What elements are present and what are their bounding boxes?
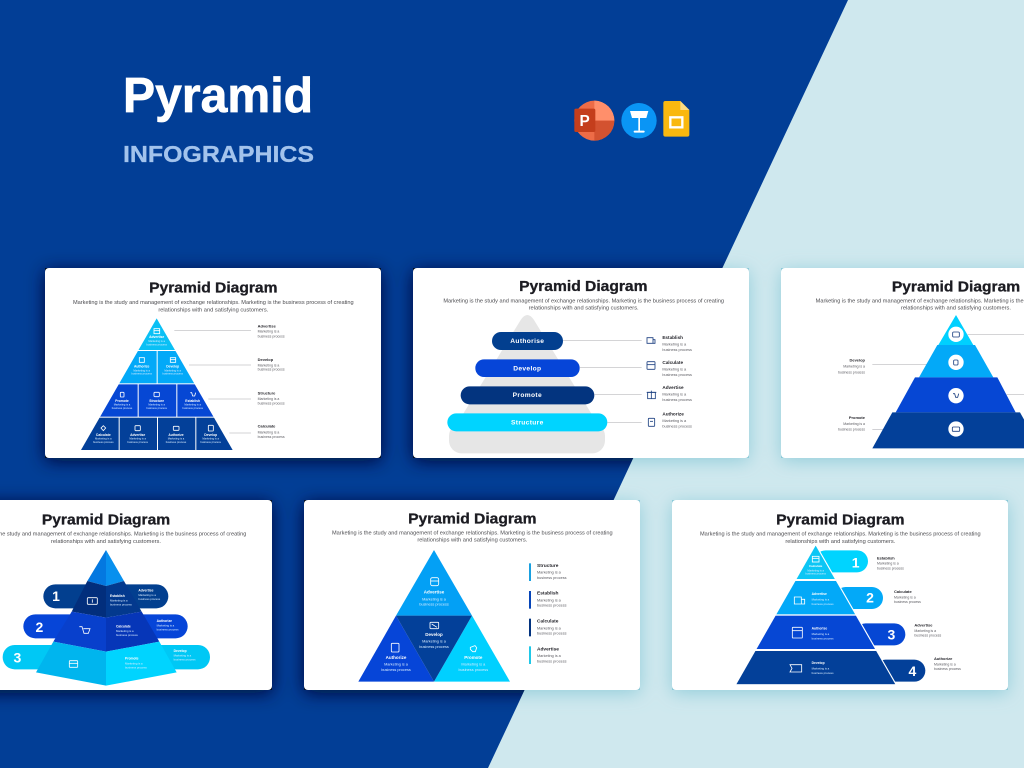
panel: stacked pills pyramid: [413, 268, 749, 458]
side labels: business process: [934, 667, 961, 671]
side labels: Advertise: [662, 385, 684, 390]
pyramid and pill labels: business process: [125, 665, 147, 669]
side labels: business process: [662, 424, 692, 428]
panel: 3D pyramid with numbered pills: [0, 500, 272, 690]
icon: Keynote: [621, 103, 657, 138]
side labels: business process: [877, 566, 904, 570]
cell labels: Marketing is a: [202, 437, 219, 441]
description: relationships with and satisfying customers.: [529, 306, 639, 312]
pyramid and pill labels: Marketing is a: [110, 599, 128, 603]
cell labels: Marketing is a: [148, 403, 165, 407]
heading: Pyramid Diagram: [892, 279, 1020, 295]
segment labels: business process: [419, 645, 449, 649]
row labels: Marketing is a: [812, 598, 830, 602]
side labels: business process: [537, 576, 567, 580]
heading: Pyramid Diagram: [42, 513, 170, 529]
numbered pills: 2: [35, 619, 43, 635]
segment icons: [391, 578, 477, 652]
numbered tabs: 1: [852, 554, 860, 570]
description: [700, 532, 981, 545]
side labels: [838, 357, 866, 432]
subtitle: INFOGRAPHICS: [123, 141, 314, 167]
row labels: Marketing is a: [812, 632, 830, 636]
side labels: Marketing is a: [934, 662, 956, 666]
segment labels: Promote: [464, 655, 483, 660]
side labels: Marketing is a: [843, 422, 865, 426]
cell labels: business process: [182, 406, 204, 410]
cell labels: Marketing is a: [129, 437, 146, 441]
pyramid and pill labels: Marketing is a: [174, 653, 192, 657]
side bars: [529, 563, 531, 664]
cell labels: Authorize: [134, 365, 149, 369]
panel: pyramid with grid cells: [45, 268, 381, 458]
side labels: business process: [537, 632, 567, 636]
side labels: Marketing is a: [537, 626, 562, 630]
row labels: [805, 564, 834, 675]
description: Marketing is the study and management of exchange relationships. Marketing is the business process of creating: [700, 532, 981, 538]
triangle segments: [358, 550, 510, 682]
icon circles: [948, 327, 964, 437]
row labels: business process: [805, 572, 827, 576]
side labels: Marketing is a: [662, 343, 687, 347]
segment labels: Marketing is a: [461, 663, 486, 667]
side labels: [662, 335, 692, 428]
description: [0, 532, 246, 545]
cell icons: [101, 329, 213, 431]
side labels: business process: [838, 370, 865, 374]
side labels: Authorize: [934, 656, 953, 661]
description: [443, 298, 724, 312]
cell labels: Authorize: [168, 433, 184, 437]
side labels: Structure: [537, 563, 559, 569]
side labels: business process: [838, 428, 865, 432]
numbered tabs: 2: [866, 590, 874, 606]
side labels: Calculate: [537, 619, 559, 625]
row labels: Advertise: [812, 592, 827, 596]
side labels: Calculate: [662, 360, 683, 365]
3D pyramid faces: [36, 550, 177, 686]
pyramid and pill labels: Marketing is a: [116, 629, 134, 633]
cell labels: Marketing is a: [164, 368, 181, 372]
pyramid and pill labels: Develop: [174, 649, 187, 653]
pyramid and pill labels: business process: [116, 633, 138, 637]
numbered pills: 1: [52, 588, 60, 604]
side labels: Marketing is a: [662, 368, 687, 372]
side labels: Develop: [258, 357, 274, 362]
segment labels: Authorize: [386, 655, 407, 660]
row labels: business process: [812, 602, 834, 606]
segment labels: business process: [459, 668, 488, 672]
segment labels: Marketing is a: [422, 640, 447, 644]
side labels: Advertise: [258, 323, 277, 328]
numbered tabs: 3: [887, 626, 895, 642]
side labels: business process: [258, 435, 285, 439]
row labels: Develop: [812, 661, 825, 665]
side labels: business process: [894, 600, 921, 604]
cell labels: Calculate: [96, 433, 111, 437]
side labels: [537, 563, 567, 663]
side labels: business process: [662, 373, 692, 377]
pyramid and pill labels: Marketing is a: [125, 661, 143, 665]
pyramid and pill labels: Marketing is a: [138, 593, 156, 597]
row icons: [790, 556, 819, 672]
pills: Develop: [513, 365, 541, 372]
cell labels: Marketing is a: [114, 403, 131, 407]
side labels: business process: [537, 604, 567, 608]
connector lines: [563, 341, 642, 422]
description: Marketing is the study and management of exchange relationships. Marketing is the business process of creating: [443, 298, 724, 304]
cell labels: Marketing is a: [148, 339, 165, 343]
app icons: [574, 101, 689, 141]
pyramid and pill labels: [110, 589, 196, 669]
side labels: Calculate: [894, 589, 912, 594]
pyramid and pill labels: business process: [157, 627, 179, 631]
side labels: Authorize: [662, 411, 684, 416]
side labels: business process: [662, 398, 692, 402]
cell labels: Develop: [204, 433, 217, 437]
side labels: Structure: [258, 390, 276, 395]
side labels: Marketing is a: [662, 393, 687, 397]
description: Marketing is the study and management of exchange relationships. Marketing is the business process of creating: [73, 300, 354, 306]
side labels: Calculate: [258, 424, 276, 429]
description: relationships with and satisfying customers.: [901, 306, 1011, 312]
pills: Structure: [511, 420, 544, 427]
segment labels: Marketing is a: [422, 597, 447, 601]
segment labels: Advertise: [424, 590, 445, 595]
cell labels: Structure: [149, 399, 164, 403]
segment labels: business process: [381, 668, 411, 672]
side labels: Establish: [877, 555, 895, 560]
cell labels: Promote: [115, 399, 129, 403]
segment labels: Develop: [425, 632, 443, 637]
row labels: business process: [812, 636, 834, 640]
side labels: business process: [258, 334, 285, 338]
segment labels: business process: [419, 603, 449, 607]
description: relationships with and satisfying customers.: [51, 539, 161, 545]
heading: Pyramid Diagram: [149, 281, 277, 297]
description: relationships with and satisfying customers.: [417, 538, 528, 544]
segment labels: [381, 590, 488, 672]
cell labels: Establish: [185, 399, 200, 403]
side labels: Establish: [662, 335, 683, 340]
side labels: Marketing is a: [894, 595, 916, 599]
cell labels: business process: [146, 406, 168, 410]
cell labels: business process: [93, 440, 114, 444]
cell labels: business process: [200, 440, 222, 444]
pyramid and pill labels: Promote: [125, 657, 139, 661]
pills: [447, 332, 607, 431]
panel: pyramid with numbered tabs: [672, 500, 1008, 690]
side labels: Marketing is a: [537, 571, 562, 575]
side labels: Marketing is a: [258, 363, 279, 367]
cell labels: business process: [162, 372, 184, 376]
cell labels: business process: [146, 342, 168, 346]
panel: triangle of triangles: [304, 500, 640, 690]
numbered tabs: 4: [908, 663, 916, 679]
numbered tabs: [815, 550, 925, 682]
cell labels: Advertise: [149, 335, 164, 339]
side labels: business process: [537, 659, 567, 663]
row labels: Authorise: [812, 626, 827, 630]
cell labels: [93, 335, 222, 444]
heading: Pyramid Diagram: [776, 513, 904, 529]
pyramid layers: [872, 315, 1024, 448]
numbered pills: [3, 584, 210, 669]
pyramid and pill labels: Advertise: [138, 589, 154, 593]
numbered pills: 3: [13, 650, 21, 666]
description: relationships with and satisfying customers.: [158, 307, 269, 313]
grey pyramid: [449, 315, 605, 453]
connector lines: [872, 364, 927, 429]
side labels: Promote: [849, 415, 866, 420]
side labels: [258, 323, 285, 439]
pyramid icons: [69, 598, 97, 667]
cell labels: Marketing is a: [184, 403, 201, 407]
side labels: Establish: [537, 591, 559, 597]
side labels: Marketing is a: [537, 598, 562, 602]
icon: PowerPoint: P: [580, 113, 590, 130]
side labels: Marketing is a: [258, 430, 279, 434]
description: Marketing is the study and management of exchange relationships. Marketing is the business process of creating: [332, 530, 613, 536]
heading: Pyramid Diagram: [408, 511, 536, 527]
side labels: Advertise: [537, 646, 559, 652]
icon: Google Slides: [663, 101, 689, 137]
row labels: Marketing is a: [807, 568, 824, 572]
side labels: Develop: [849, 357, 866, 362]
cell labels: business process: [112, 406, 133, 410]
cell labels: business process: [166, 440, 187, 444]
cell labels: business process: [127, 440, 149, 444]
side labels: business process: [914, 634, 942, 638]
pyramid and pill labels: Marketing is a: [157, 623, 175, 627]
cell labels: Develop: [166, 365, 179, 369]
side labels: Marketing is a: [843, 365, 865, 369]
side labels: [877, 555, 961, 671]
pyramid grid: [81, 318, 232, 450]
side labels: Marketing is a: [258, 330, 279, 334]
row labels: Calculate: [809, 564, 823, 568]
row labels: business process: [812, 671, 834, 675]
title: Pyramid: [123, 69, 313, 123]
cell labels: Marketing is a: [133, 368, 150, 372]
pyramid and pill labels: Authorize: [157, 619, 172, 623]
cell labels: Marketing is a: [95, 437, 112, 441]
connector lines: [174, 330, 251, 433]
segment labels: Marketing is a: [384, 663, 409, 667]
side labels: Marketing is a: [662, 419, 687, 423]
description: relationships with and satisfying customers.: [785, 539, 896, 545]
side labels: business process: [662, 348, 692, 352]
side labels: Marketing is a: [914, 629, 936, 633]
cell labels: Advertise: [130, 433, 145, 437]
cell labels: Marketing is a: [168, 437, 185, 441]
description: [332, 530, 613, 544]
panel: layered pyramid, cropped at right: [781, 268, 1024, 458]
pyramid and pill labels: business process: [174, 657, 196, 661]
side labels: Advertise: [914, 623, 933, 628]
side labels: Marketing is a: [258, 397, 279, 401]
pills: Authorise: [510, 338, 544, 345]
pyramid rows: [735, 545, 898, 684]
side labels: Marketing is a: [537, 654, 562, 658]
side labels: Marketing is a: [877, 562, 899, 566]
side labels: business process: [258, 368, 285, 372]
cell labels: business process: [131, 372, 153, 376]
description: [816, 298, 1024, 312]
pyramid and pill labels: business process: [138, 597, 161, 601]
pyramid and pill labels: Calculate: [116, 625, 131, 629]
side icons: [647, 338, 656, 426]
side labels: business process: [258, 401, 285, 405]
right connector lines: [968, 335, 1024, 394]
pyramid and pill labels: business process: [110, 603, 132, 607]
heading: Pyramid Diagram: [519, 279, 647, 295]
pyramid and pill labels: Establish: [110, 594, 125, 598]
pills: Promote: [513, 392, 542, 399]
row labels: Marketing is a: [812, 667, 830, 671]
description: [73, 300, 354, 313]
